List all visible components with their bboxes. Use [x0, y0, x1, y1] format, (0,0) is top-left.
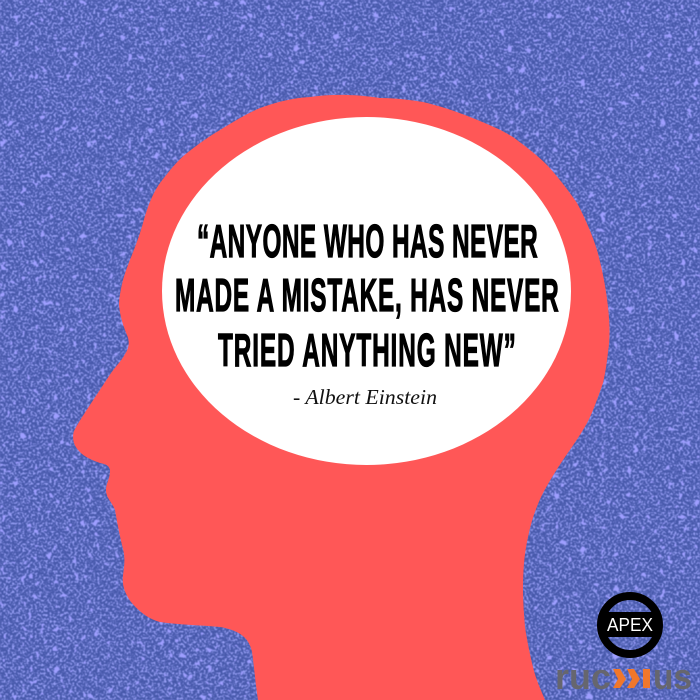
- quote text: “ANYONE WHO HAS NEVER: [197, 216, 538, 267]
- logo: APEX roundel: [601, 596, 659, 654]
- logo: ruckus wordmark: [555, 656, 692, 697]
- quote text: TRIED ANYTHING NEW”: [218, 325, 516, 376]
- logo: ruckus wordmark: ruc: [555, 656, 611, 697]
- quote text: MADE A MISTAKE, HAS NEVER: [175, 270, 559, 321]
- quote text: [175, 216, 559, 376]
- logo: ruckus wordmark: us: [653, 656, 692, 697]
- logo: APEX roundel: APEX: [607, 615, 653, 635]
- attribution: - Albert Einstein: [293, 385, 437, 409]
- white oval brain panel: [162, 117, 571, 465]
- head silhouette in profile: [73, 95, 610, 700]
